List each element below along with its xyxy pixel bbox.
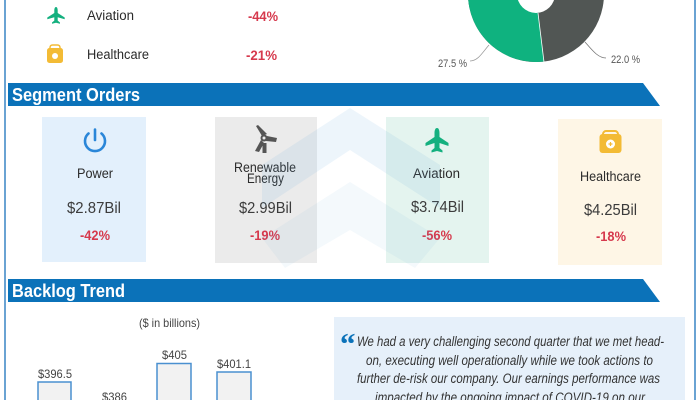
bar chart: backlog <box>38 316 251 400</box>
icon: wind turbine <box>255 125 277 153</box>
label: power: Power <box>77 166 113 181</box>
icon: aviation plane <box>426 128 448 152</box>
heading: backlog trend: Backlog Trend <box>12 280 125 301</box>
panel: aviation card <box>386 117 489 263</box>
label: renewable energy: Renewable <box>234 160 296 175</box>
heading: backlog trend <box>8 279 660 302</box>
value: healthcare orders: $4.25Bil <box>584 202 637 219</box>
watermark: chevrons <box>262 108 440 268</box>
label: renewable energy: Energy <box>247 171 284 186</box>
donut chart <box>438 0 640 70</box>
label: aviation: Aviation <box>413 166 460 181</box>
label: 27.5 percent: 27.5 % <box>438 58 467 70</box>
bar: 401.1 <box>217 357 251 400</box>
icon: power <box>85 130 105 151</box>
heading: segment orders: Segment Orders <box>12 84 140 105</box>
panel: healthcare card <box>558 119 662 265</box>
icon: healthcare kit small <box>47 45 63 63</box>
label: aviation: Aviation <box>87 8 134 23</box>
value: power change: -42% <box>80 228 110 243</box>
panel: segment revenue rows <box>47 7 278 63</box>
bar: 396.5: $396.5 <box>38 367 72 381</box>
chart unit note: ($ in billions) <box>139 316 200 330</box>
value: renewable change: -19% <box>250 228 280 243</box>
bar: 405 <box>157 348 191 400</box>
bar: 401.1: $401.1 <box>217 357 251 371</box>
icon: aviation plane small <box>47 7 65 24</box>
value: aviation change: -56% <box>422 228 452 243</box>
quote text: on, executing well operationally while we took actions to <box>366 353 653 368</box>
panel: power card <box>42 117 146 262</box>
quote text <box>357 334 664 400</box>
value: power orders: $2.87Bil <box>67 200 121 217</box>
label: healthcare: Healthcare <box>87 47 149 62</box>
bar: 405: $405 <box>162 348 187 362</box>
value: healthcare change: -18% <box>596 229 626 244</box>
bar: 396.5 <box>38 367 72 400</box>
panel: CEO quote <box>334 317 685 400</box>
value: aviation change: -44% <box>248 9 278 24</box>
panel: renewable energy card <box>215 117 317 263</box>
label: renewable energy <box>234 160 296 186</box>
value: healthcare change: -21% <box>246 48 277 63</box>
value: renewable orders: $2.99Bil <box>239 200 292 217</box>
icon: quote mark: “ <box>340 326 356 361</box>
label: healthcare: Healthcare <box>580 169 641 184</box>
heading: segment orders <box>8 83 660 106</box>
icon: healthcare kit <box>600 131 622 153</box>
label: 22.0 percent: 22.0 % <box>611 54 640 66</box>
value: aviation orders: $3.74Bil <box>411 199 464 216</box>
